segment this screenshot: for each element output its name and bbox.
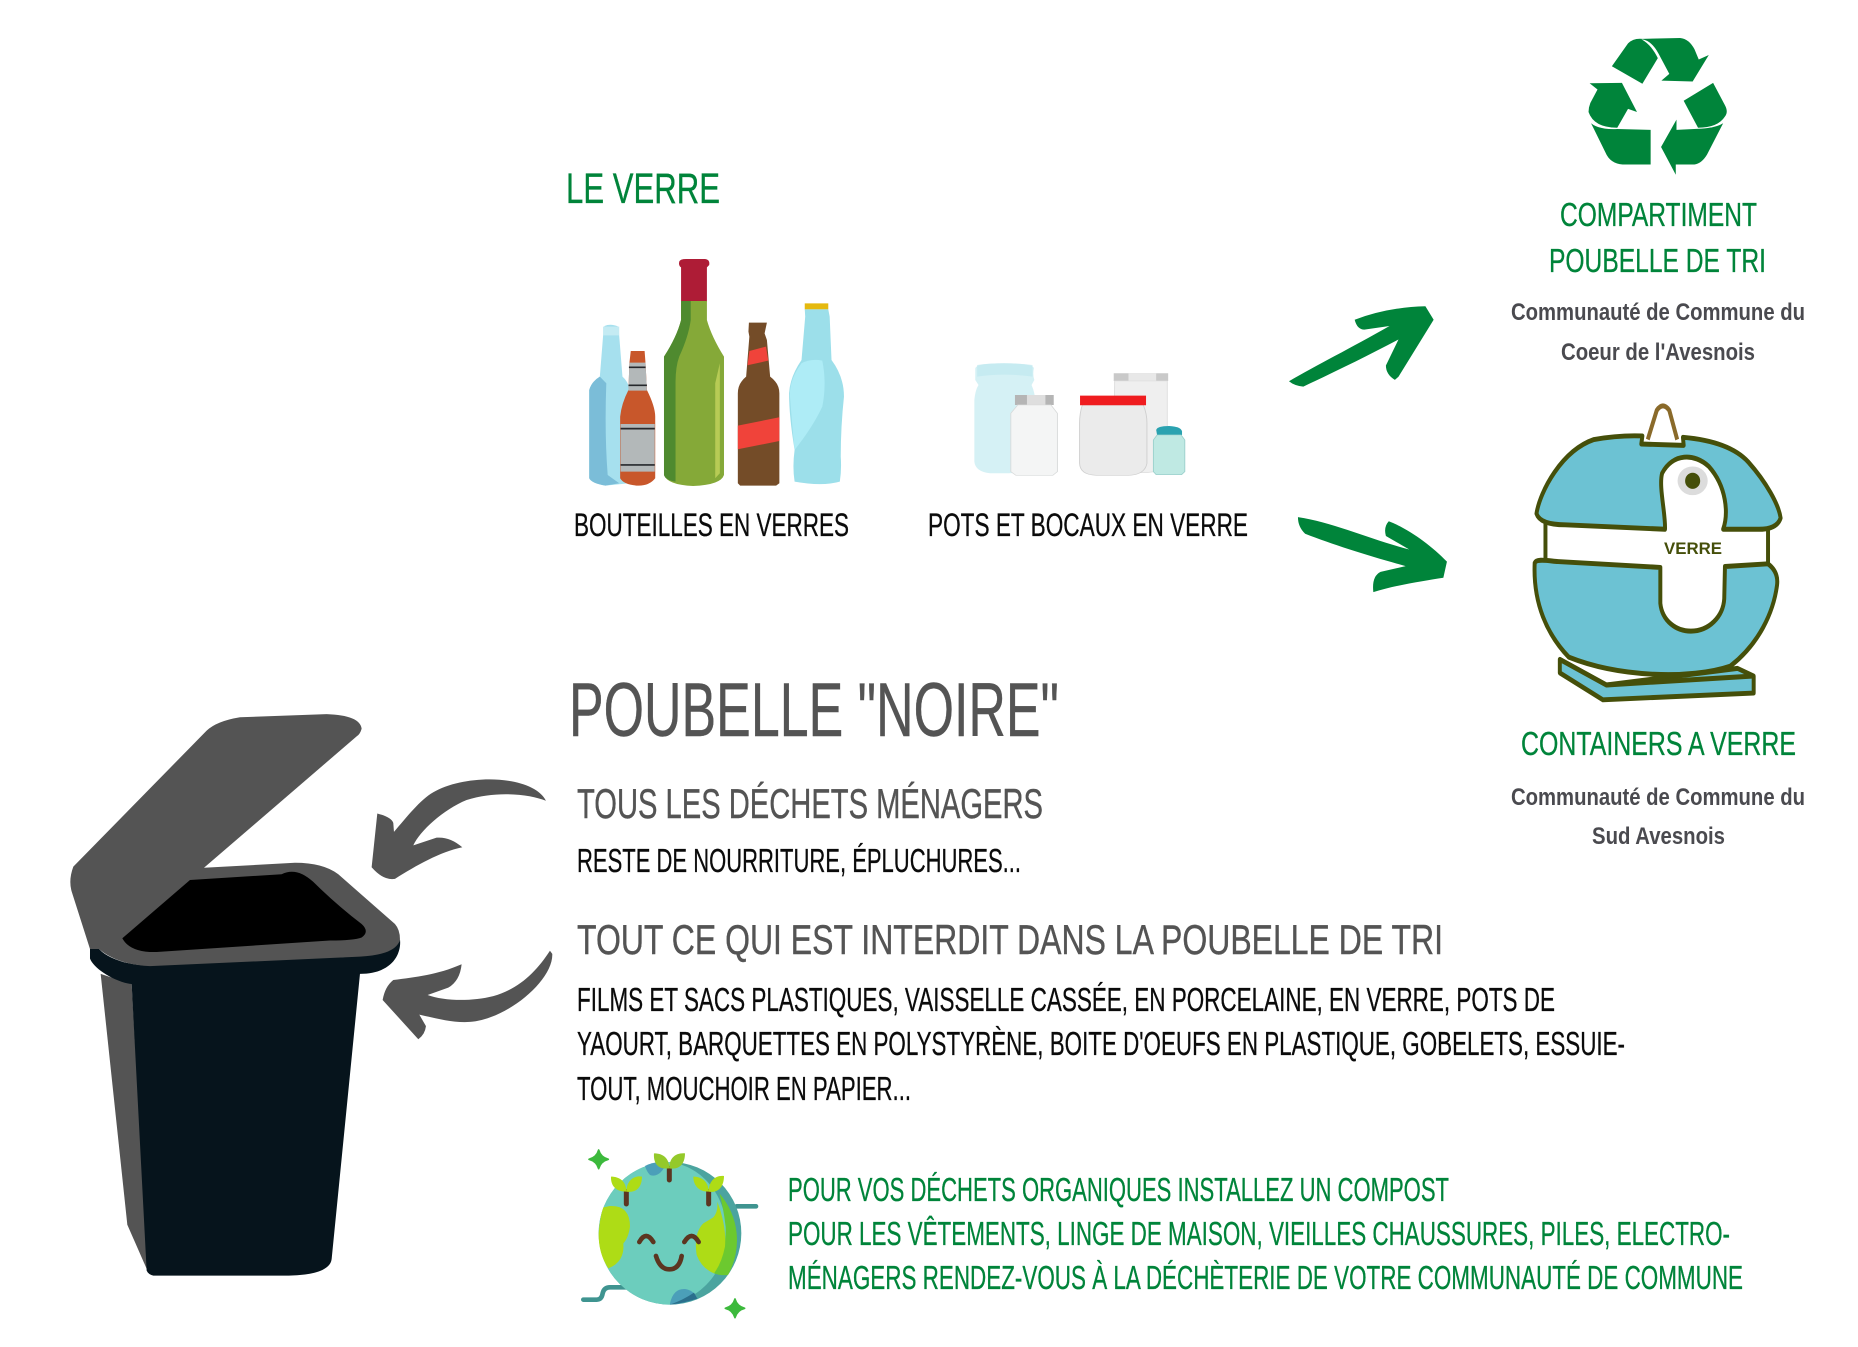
label: bouteilles: BOUTEILLES EN VERRES — [574, 507, 849, 543]
icon: glass container — [1535, 406, 1781, 700]
text: coeur de l'avesnois: Coeur de l'Avesnois — [1561, 339, 1755, 366]
text: forbidden list: TOUT, MOUCHOIR EN PAPIER... — [577, 1070, 911, 1107]
arrows: green to tri and container — [1289, 306, 1447, 592]
text: communaute coeur: Communauté de Commune du — [1511, 299, 1805, 326]
arrow: up to compartment — [1289, 306, 1434, 387]
text: communaute sud: Communauté de Commune du — [1511, 784, 1805, 811]
subheading: tous les dechets: TOUS LES DÉCHETS MÉNAGERS — [577, 780, 1043, 827]
icon: glass bottles — [589, 259, 844, 486]
arrow: down to container — [1298, 517, 1447, 592]
label: pots et bocaux: POTS ET BOCAUX EN VERRE — [928, 507, 1248, 543]
icon: recycling symbol — [1589, 38, 1727, 175]
icon: black bin — [70, 714, 400, 1276]
text: sud avesnois: Sud Avesnois — [1592, 823, 1725, 850]
icon: glass jars — [974, 363, 1185, 475]
text: green compost advice: POUR VOS DÉCHETS ORGANIQUES INSTALLEZ UN COMPOST — [788, 1171, 1449, 1208]
heading: poubelle de tri: POUBELLE DE TRI — [1549, 242, 1766, 279]
icon: smiling earth — [583, 1150, 756, 1318]
heading: poubelle noire: POUBELLE "NOIRE" — [569, 668, 1059, 753]
text: forbidden list — [577, 981, 1625, 1107]
label: verre on container: VERRE — [1664, 539, 1722, 558]
text: reste de nourriture: RESTE DE NOURRITURE, ÉPLUCHURES... — [577, 842, 1021, 879]
arrow: lower — [383, 951, 552, 1039]
text: green compost advice — [788, 1171, 1743, 1296]
arrows: gray into bin — [372, 779, 552, 1039]
heading: compartiment: COMPARTIMENT — [1560, 196, 1757, 233]
subheading: tout ce qui est interdit: TOUT CE QUI EST INTERDIT DANS LA POUBELLE DE TRI — [577, 916, 1443, 963]
heading: le verre: LE VERRE — [566, 165, 720, 213]
arrow: upper — [372, 779, 546, 879]
